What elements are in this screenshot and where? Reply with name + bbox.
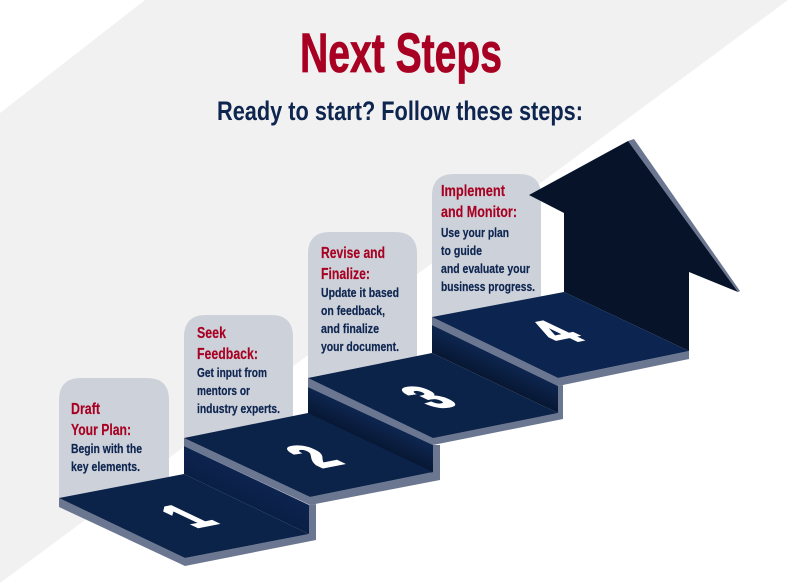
step 2 body bbox=[197, 365, 280, 416]
step 2 body: Get input from bbox=[197, 365, 267, 380]
step 1 platform bbox=[59, 474, 309, 566]
step 3 platform bbox=[308, 353, 558, 505]
step 4 body: and evaluate your bbox=[441, 261, 530, 276]
step 3 body: and finalize bbox=[321, 321, 379, 336]
step 4 body: business progress. bbox=[441, 279, 535, 294]
step 1 heading: Your Plan: bbox=[71, 422, 131, 439]
title: Next Steps bbox=[300, 21, 502, 84]
card: step 4 bbox=[432, 174, 541, 319]
step 4 platform bbox=[432, 292, 689, 445]
step 1 heading bbox=[71, 401, 131, 439]
step 2 heading: Seek bbox=[197, 325, 226, 342]
step 4 body: Use your plan bbox=[441, 225, 509, 240]
number 1: 1 bbox=[143, 498, 232, 534]
number 4: 4 bbox=[511, 314, 600, 350]
step 4 heading: and Monitor: bbox=[441, 204, 517, 221]
step 2 heading bbox=[197, 325, 258, 363]
step 3 body: Update it based bbox=[321, 285, 399, 300]
step 3 heading bbox=[321, 245, 385, 283]
step 4 heading: Implement bbox=[441, 183, 505, 200]
number 3: 3 bbox=[384, 379, 473, 415]
step 3 body: on feedback, bbox=[321, 303, 385, 318]
step 1 body: Begin with the bbox=[71, 441, 142, 456]
step 2 body: industry experts. bbox=[197, 401, 280, 416]
step 1 body: key elements. bbox=[71, 459, 140, 474]
step 4 body: to guide bbox=[441, 243, 482, 258]
arrow head and shaft bbox=[529, 139, 740, 351]
step 3 heading: Finalize: bbox=[321, 266, 370, 283]
step 3 body bbox=[321, 285, 399, 354]
step 3 heading: Revise and bbox=[321, 245, 385, 262]
subtitle: Ready to start? Follow these steps: bbox=[217, 96, 583, 126]
card: step 3 bbox=[308, 232, 417, 380]
step 1 body bbox=[71, 441, 142, 474]
step 3 body: your document. bbox=[321, 339, 399, 354]
step 4 heading bbox=[441, 183, 517, 221]
step 2 body: mentors or bbox=[197, 383, 250, 398]
number 2: 2 bbox=[269, 438, 358, 474]
step 2 heading: Feedback: bbox=[197, 346, 258, 363]
step 2 platform bbox=[184, 413, 433, 566]
card: step 1 bbox=[59, 378, 169, 498]
step 4 body bbox=[441, 225, 535, 294]
step 1 heading: Draft bbox=[71, 401, 100, 418]
card: step 2 bbox=[184, 315, 293, 440]
